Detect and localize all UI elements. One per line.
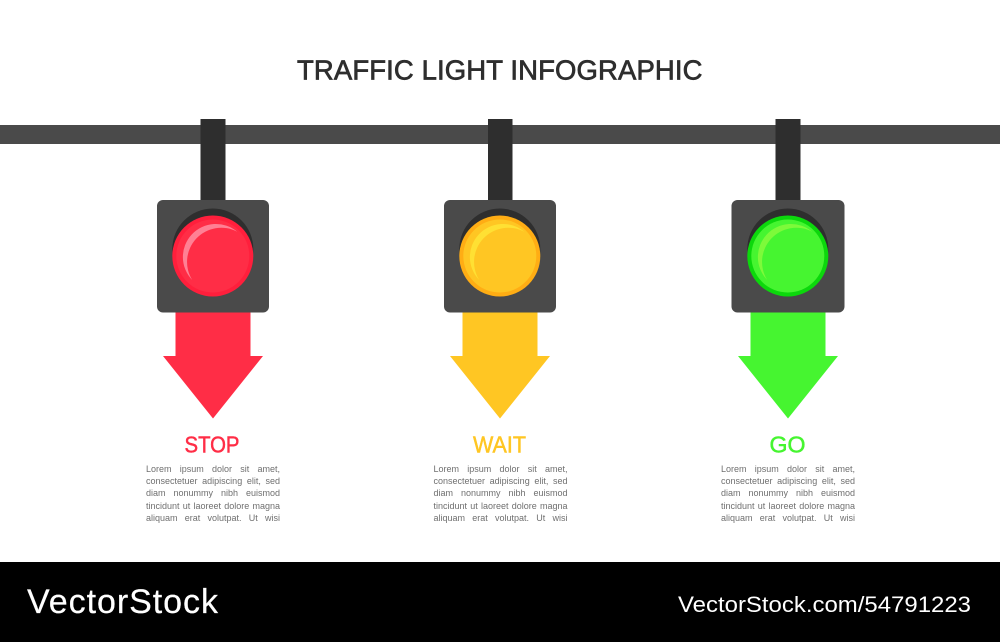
visor [747,208,828,290]
hanger [775,119,800,201]
lamp highlight [757,224,812,280]
title: TRAFFIC LIGHT INFOGRAPHIC [297,54,702,86]
arrow [450,312,550,418]
housing [156,200,268,312]
panel: stop [146,119,280,523]
arrow [738,312,838,418]
text block: go: tincidunt ut laoreet dolore magna [721,501,855,511]
label: go: GO [769,432,805,458]
lamp rim [747,216,828,296]
text block: go: consectetuer adipiscing elit, sed [721,476,855,486]
text block: stop: consectetuer adipiscing elit, sed [146,476,280,486]
lamp rim [172,216,253,296]
text block: wait: consectetuer adipiscing elit, sed [434,476,568,486]
lamp face [751,220,824,292]
footer bar [0,562,1000,642]
horizontal pole [0,125,1000,144]
traffic light and arrow: stop [157,119,269,418]
traffic light and arrow: go [732,119,844,418]
text block: wait: aliquam erat volutpat. Ut wisi [434,513,568,523]
text block: wait [434,464,568,523]
visor [172,208,253,290]
housing [731,200,844,312]
housing [444,200,556,312]
text block: stop: diam nonummy nibh euismod [146,488,280,498]
lamp highlight [182,224,237,280]
text block: stop: Lorem ipsum dolor sit amet, [146,464,280,474]
footer logo text: VectorStock [27,583,219,621]
panel: wait [434,119,568,523]
text block: stop [146,464,280,523]
lamp rim [459,216,540,296]
text block: stop: aliquam erat volutpat. Ut wisi [146,513,280,523]
text block: stop: tincidunt ut laoreet dolore magna [146,501,280,511]
text block: go: aliquam erat volutpat. Ut wisi [721,513,855,523]
text block: wait: tincidunt ut laoreet dolore magna [434,501,568,511]
lamp highlight [470,224,524,280]
text block: go [721,464,855,523]
panel: go [721,119,855,523]
lamp face [176,220,249,292]
text block: go: diam nonummy nibh euismod [721,488,855,498]
hanger [488,119,512,201]
hanger [200,119,225,201]
text block: go: Lorem ipsum dolor sit amet, [721,464,855,474]
lamp face [463,220,536,292]
text block: wait: diam nonummy nibh euismod [434,488,568,498]
text block: wait: Lorem ipsum dolor sit amet, [434,464,568,474]
traffic light and arrow: wait [444,119,556,418]
label: stop: STOP [184,432,239,458]
arrow [162,312,262,418]
footer image id: VectorStock.com/54791223 [678,592,971,617]
label: wait: WAIT [473,432,526,458]
visor [459,208,540,290]
